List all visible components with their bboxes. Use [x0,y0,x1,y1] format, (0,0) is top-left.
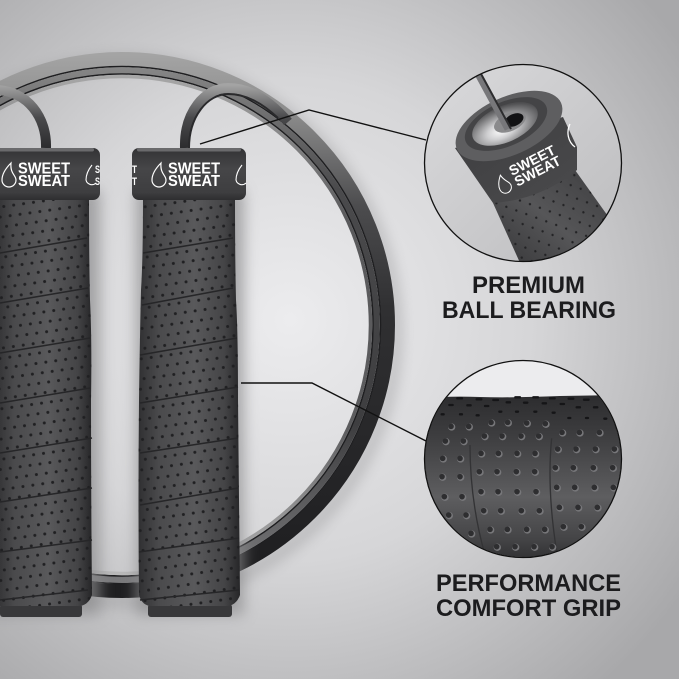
left handle grip bands [0,238,92,600]
right collar side logo: T [132,176,137,188]
grip bumps [442,397,615,547]
detail grip [493,171,606,261]
label: premium: PREMIUM [472,272,585,299]
left handle end cap [0,604,82,617]
detail logo: SWEAT [512,152,564,189]
detail collar [455,117,577,203]
callout: premium ball bearing [424,64,625,299]
detail circle outline [424,64,622,262]
callout: performance comfort grip [420,360,625,597]
right handle cable loop [185,88,288,148]
left collar side logo: S [95,164,100,176]
left handle [0,90,100,617]
label line two: ball bearing: BALL BEARING [442,297,616,324]
detail circle: grip background [425,361,621,557]
right handle end cap [148,604,232,617]
detail circle: bearing background [425,65,621,261]
rope shadow [0,61,396,601]
right handle grip [138,198,240,606]
right collar logo: SWEET [168,160,220,178]
left handle cable loop [0,90,46,148]
left handle grip [0,198,92,606]
detail collar top [456,90,562,162]
right collar side logo: T [132,164,137,176]
detail logo: SWEET [506,142,558,179]
left collar logo [2,160,70,190]
grip surface [420,395,625,565]
detail bearing rings [464,97,548,151]
left collar logo: SWEET [18,160,70,178]
left collar logo: SWEAT [18,173,70,190]
right handle grip bands [139,238,239,600]
right handle collar [132,148,246,200]
leader line: ball bearing [200,110,426,144]
detail logo [498,144,559,194]
detail: grip texture [420,395,625,565]
shadows behind handles [0,190,244,615]
leader line: comfort grip [241,383,426,441]
right collar logo [152,160,220,190]
right collar logo: SWEAT [168,173,220,190]
detail circle outline [424,360,622,558]
jump rope cable ring [0,59,388,591]
left collar side logo [86,164,100,188]
right collar side logo [132,164,246,188]
detail: tilted handle [455,74,606,261]
label line two: comfort grip: COMFORT GRIP [436,595,621,622]
right handle [132,88,288,617]
label: performance: PERFORMANCE [436,570,621,597]
left handle collar [0,148,100,200]
detail side logo [568,124,575,147]
detail cable [477,72,508,129]
left collar side logo: S [95,176,100,188]
grip wrap lines [470,438,557,555]
